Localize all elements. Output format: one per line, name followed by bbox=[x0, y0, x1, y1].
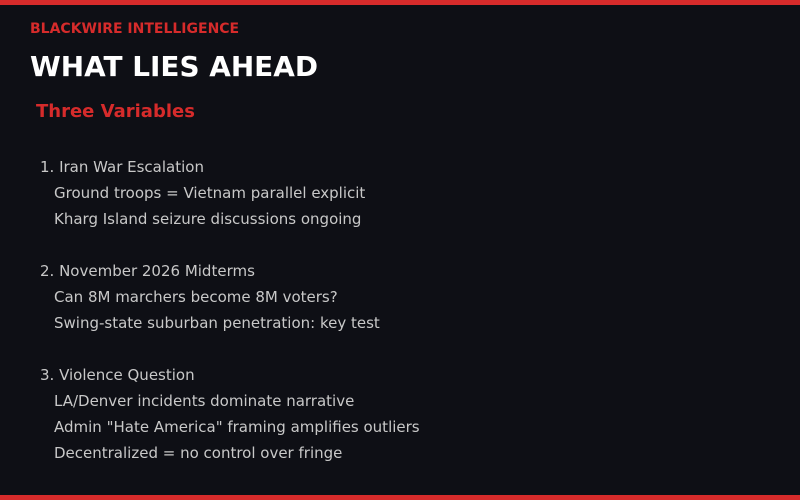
item 3: LA/Denver incidents dominate narrative bbox=[54, 392, 354, 410]
title: WHAT LIES AHEAD bbox=[30, 50, 318, 83]
item 2: Swing-state suburban penetration: key test bbox=[54, 314, 380, 332]
item 1: 1. Iran War Escalation bbox=[40, 158, 204, 176]
item 2: 2. November 2026 Midterms bbox=[40, 262, 255, 280]
item 1 bbox=[40, 158, 365, 228]
list: three variables bbox=[40, 158, 420, 462]
item 3: 3. Violence Question bbox=[40, 366, 195, 384]
item 2 bbox=[40, 262, 380, 332]
item 3: Decentralized = no control over fringe bbox=[54, 444, 342, 462]
brand label: BLACKWIRE INTELLIGENCE bbox=[30, 21, 239, 37]
item 3 bbox=[40, 366, 420, 462]
item 2: Can 8M marchers become 8M voters? bbox=[54, 288, 338, 306]
subheading: Three Variables bbox=[36, 101, 195, 122]
item 1: Ground troops = Vietnam parallel explicit bbox=[54, 184, 365, 202]
item 1: Kharg Island seizure discussions ongoing bbox=[54, 210, 361, 228]
item 3: Admin "Hate America" framing amplifies outliers bbox=[54, 418, 420, 436]
